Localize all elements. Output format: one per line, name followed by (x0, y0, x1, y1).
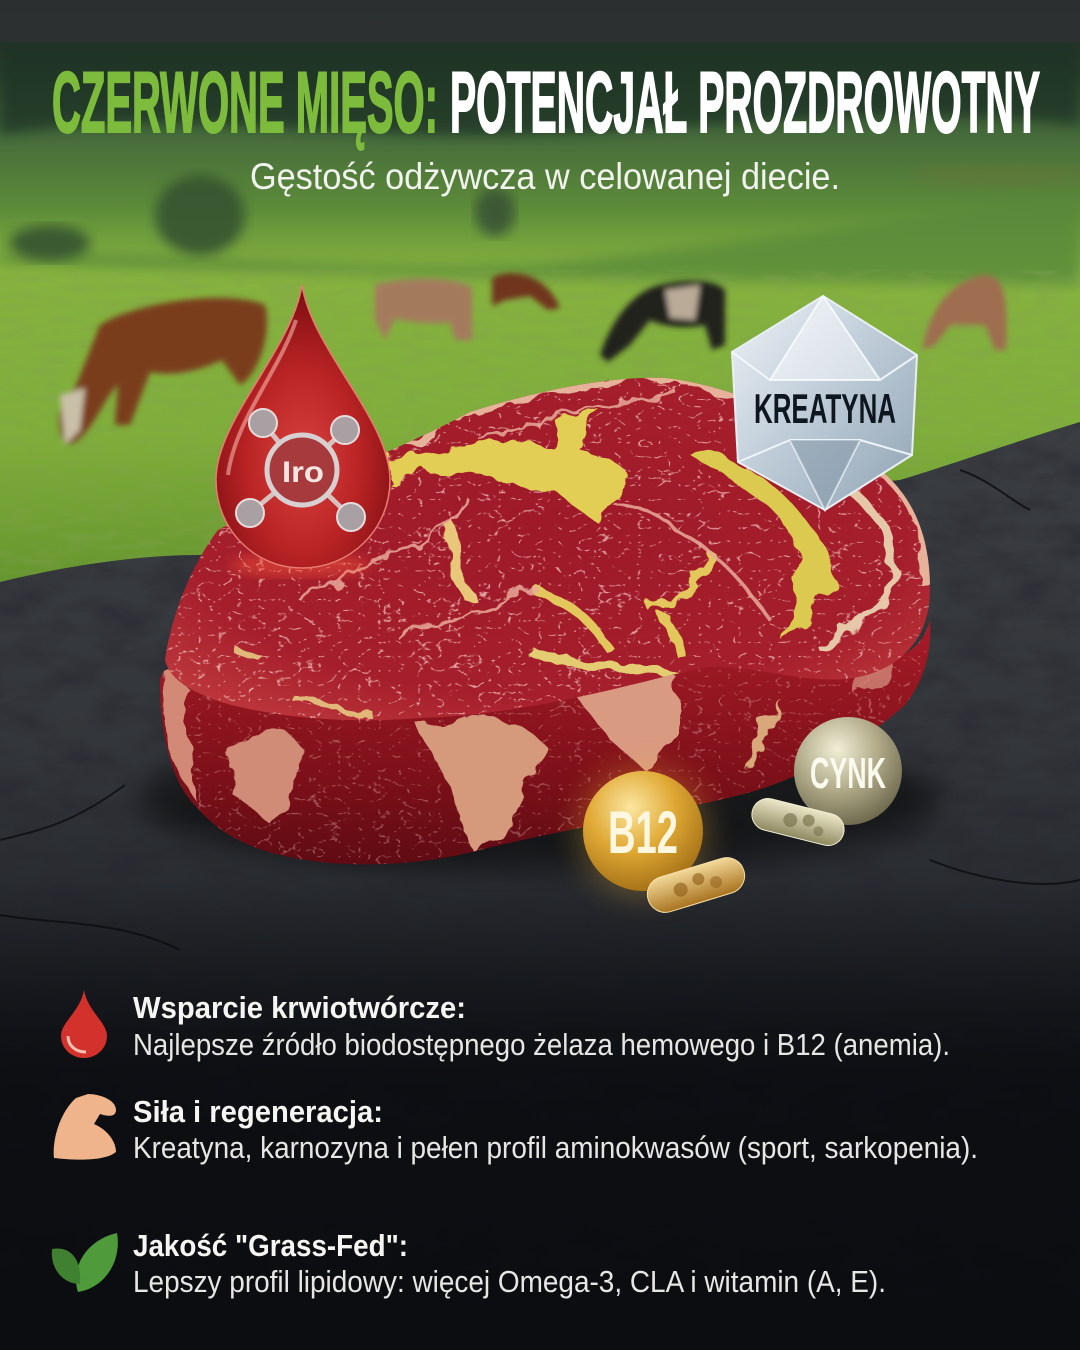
background: green pasture (0, 0, 1080, 620)
heading: Siła i regeneracja: (133, 1094, 383, 1129)
B12 label: B12 (608, 799, 678, 866)
capsule (643, 853, 749, 917)
zinc label: CYNK (810, 749, 886, 798)
subtitle: Gęstość odżywcza w celowanej diecie. (250, 156, 840, 197)
description: Lepszy profil lipidowy: więcej Omega-3, CLA i witamin (A, E). (133, 1264, 886, 1299)
creatine label: KREATYNA (754, 385, 896, 432)
icon: B12 gold sphere with capsule (575, 763, 749, 917)
title: CZERWONE MIĘSO: (52, 55, 438, 151)
icon: blood drop with iron molecule (216, 285, 390, 577)
iron molecule bonds (250, 423, 351, 517)
cows grazing in the background (59, 273, 1007, 445)
heading: Jakość "Grass-Fed": (133, 1228, 408, 1263)
steak top face (150, 370, 940, 730)
icon: creatine crystal (732, 296, 917, 510)
iron label: Iro (282, 456, 324, 489)
heading: Wsparcie krwiotwórcze: (133, 990, 466, 1025)
description: Kreatyna, karnozyna i pełen profil aminokwasów (sport, sarkopenia). (133, 1130, 978, 1165)
steak side (160, 620, 930, 864)
slate surface (0, 422, 1080, 1020)
marbling fat (215, 378, 930, 712)
description: Najlepsze źródło biodostępnego żelaza hemowego i B12 (anemia). (133, 1027, 950, 1062)
benefit: grass-fed (52, 1228, 886, 1299)
steak shadow (140, 730, 940, 870)
icon: zinc silver sphere with capsule (749, 717, 902, 849)
steak (140, 370, 940, 880)
icon: green leaves (52, 1233, 118, 1292)
benefit: blood support (61, 990, 950, 1062)
icon: red drop (61, 990, 107, 1058)
icon: flexed arm (54, 1094, 116, 1160)
capsule (749, 795, 847, 849)
top dark overlay behind title (0, 0, 1080, 230)
benefit: strength (54, 1094, 978, 1165)
